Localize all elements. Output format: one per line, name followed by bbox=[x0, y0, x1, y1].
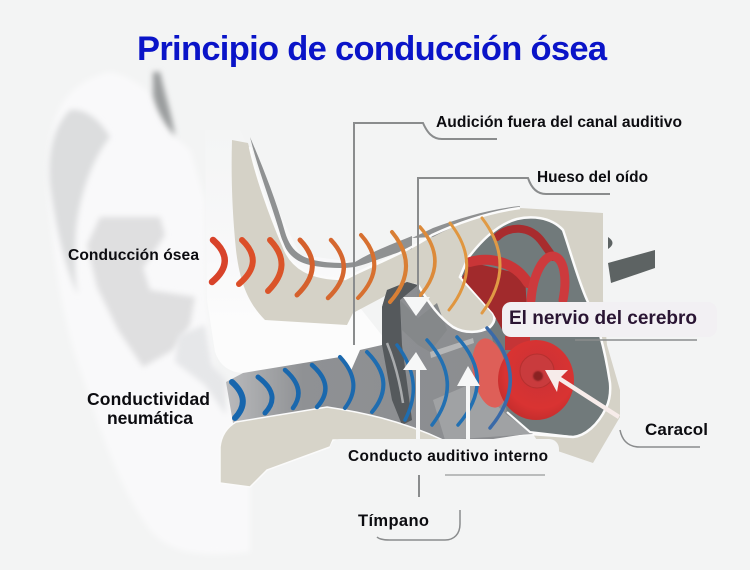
middle ear dark wall bbox=[382, 282, 418, 425]
cochlea window bbox=[467, 336, 513, 410]
cavity lower white edge bbox=[507, 412, 573, 437]
bone conduction waves bbox=[212, 218, 500, 313]
lump outline bbox=[418, 258, 494, 332]
stapes bar bbox=[430, 338, 474, 358]
lower bone bbox=[220, 407, 443, 487]
lower canal light bbox=[433, 383, 533, 440]
middle ear and ear canal bbox=[226, 282, 573, 441]
leader line: air hearing bbox=[354, 123, 497, 345]
nerve to brain bbox=[608, 237, 655, 283]
inner ear cavity bbox=[440, 217, 610, 440]
leader line: eardrum bbox=[418, 475, 420, 497]
arrow up: inner canal bbox=[457, 366, 480, 439]
spiral centre bbox=[533, 371, 543, 381]
cochlea spiral bbox=[520, 354, 554, 388]
label: air conduction: Conductividad bbox=[87, 389, 210, 409]
underline bbox=[575, 339, 697, 341]
arrow: cochlea bbox=[545, 370, 620, 419]
semicircular canals bbox=[462, 229, 565, 335]
ear shadow behind helix bbox=[153, 72, 175, 136]
title: Principio de conducción ósea bbox=[137, 30, 608, 68]
label: cochlea: Caracol bbox=[645, 420, 708, 439]
helix inner fold bbox=[49, 110, 110, 295]
label: inner canal: Conducto auditivo interno bbox=[348, 448, 548, 465]
label box: cochlea bbox=[620, 417, 723, 447]
underline bbox=[445, 474, 545, 476]
grey skin strip bbox=[250, 137, 520, 279]
label: air hearing: Audición fuera del canal auditivo bbox=[436, 114, 682, 131]
label: air conduction: neumática bbox=[107, 408, 193, 428]
underline bbox=[620, 430, 700, 447]
outer ear bbox=[47, 72, 250, 554]
tympanum label underline bbox=[377, 510, 460, 540]
nerve stub bbox=[608, 237, 612, 249]
leader line: ear bone bbox=[418, 178, 610, 298]
arrow down: ear bone bbox=[403, 297, 430, 316]
temporal bone bbox=[232, 140, 620, 463]
label: ear bone: Hueso del oído bbox=[537, 169, 648, 186]
tympanic thin curve bbox=[387, 343, 403, 403]
cochlea bbox=[467, 336, 574, 420]
ossicle chain bbox=[400, 300, 447, 352]
white skin area bbox=[205, 130, 384, 373]
air conduction waves bbox=[232, 328, 510, 428]
label: bone conduction: Conducción ósea bbox=[68, 247, 199, 264]
label box: inner canal bbox=[330, 439, 559, 475]
arrow up: eardrum bbox=[403, 352, 427, 439]
label box: nerve bbox=[502, 302, 717, 340]
label: eardrum: Tímpano bbox=[358, 512, 429, 530]
concha lower fold bbox=[175, 325, 226, 415]
cochlea body bbox=[498, 340, 574, 420]
concha bbox=[87, 217, 195, 367]
white band under strip bbox=[250, 147, 520, 279]
label: nerve: El nervio del cerebro bbox=[509, 308, 697, 329]
